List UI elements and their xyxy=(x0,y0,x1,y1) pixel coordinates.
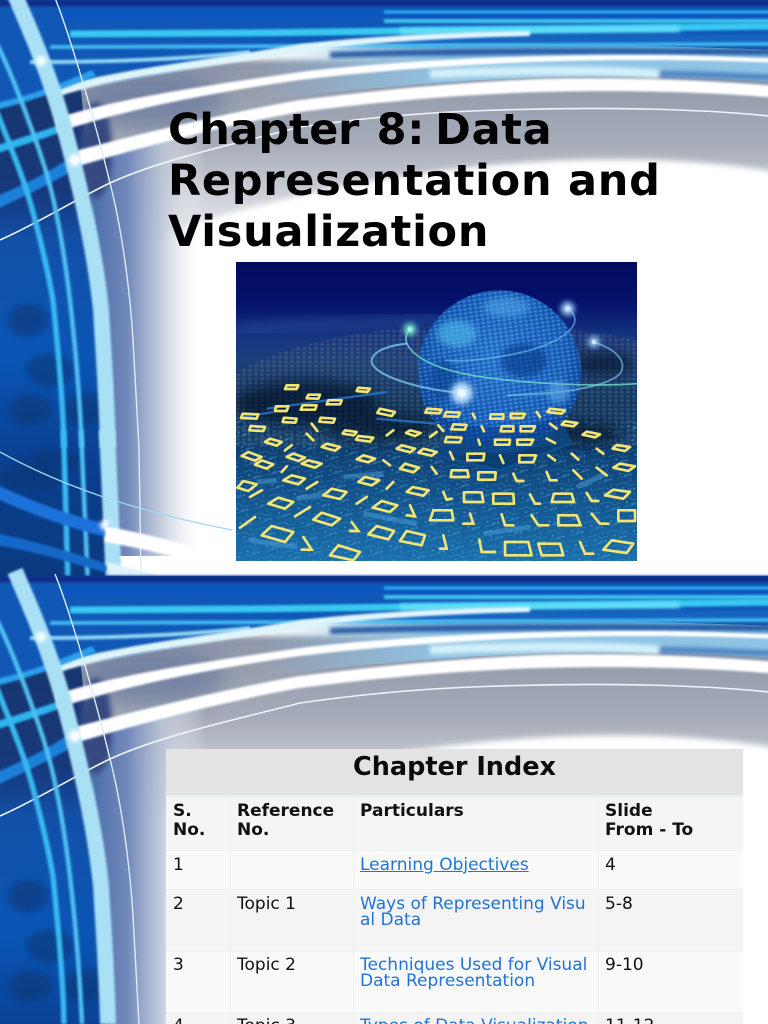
row 1 xyxy=(173,855,616,875)
header row: Reference xyxy=(237,801,334,821)
row 1: Learning Objectives xyxy=(360,855,529,875)
header row: Slide xyxy=(605,801,653,821)
header row: S. xyxy=(173,801,192,821)
row 1: 1 xyxy=(173,855,184,875)
header row xyxy=(173,801,693,840)
title: Visualization xyxy=(168,207,489,257)
title xyxy=(168,105,661,257)
row 2: 2 xyxy=(173,894,184,914)
row 1: 4 xyxy=(605,855,616,875)
row 3: 9-10 xyxy=(605,955,644,975)
row 2 xyxy=(173,894,633,930)
binary ones xyxy=(240,412,608,554)
row 2: 5-8 xyxy=(605,894,633,914)
binary dot field xyxy=(236,327,637,447)
row 3 xyxy=(173,955,644,991)
row 2: Ways of Representing Visu xyxy=(360,894,586,914)
binary zeros xyxy=(237,385,635,560)
table heading xyxy=(166,749,743,795)
row 3: Topic 2 xyxy=(237,955,296,975)
header row: No. xyxy=(237,820,269,840)
row 2: al Data xyxy=(360,910,421,930)
header row: Particulars xyxy=(360,801,464,821)
row backgrounds xyxy=(166,795,743,1024)
title: Chapter 8: Data xyxy=(168,105,552,155)
image: globe over binary data field xyxy=(236,262,637,561)
row 4 xyxy=(173,1018,654,1024)
header row: From - To xyxy=(605,820,693,840)
row 2: Topic 1 xyxy=(237,894,296,914)
row 3: 3 xyxy=(173,955,184,975)
title: Representation and xyxy=(168,156,661,206)
row 3: Techniques Used for Visual xyxy=(360,955,587,975)
header row: No. xyxy=(173,820,205,840)
table heading: Chapter Index xyxy=(353,752,556,782)
orbit rings xyxy=(372,309,637,395)
globe xyxy=(418,290,581,454)
row 3: Data Representation xyxy=(360,971,535,991)
